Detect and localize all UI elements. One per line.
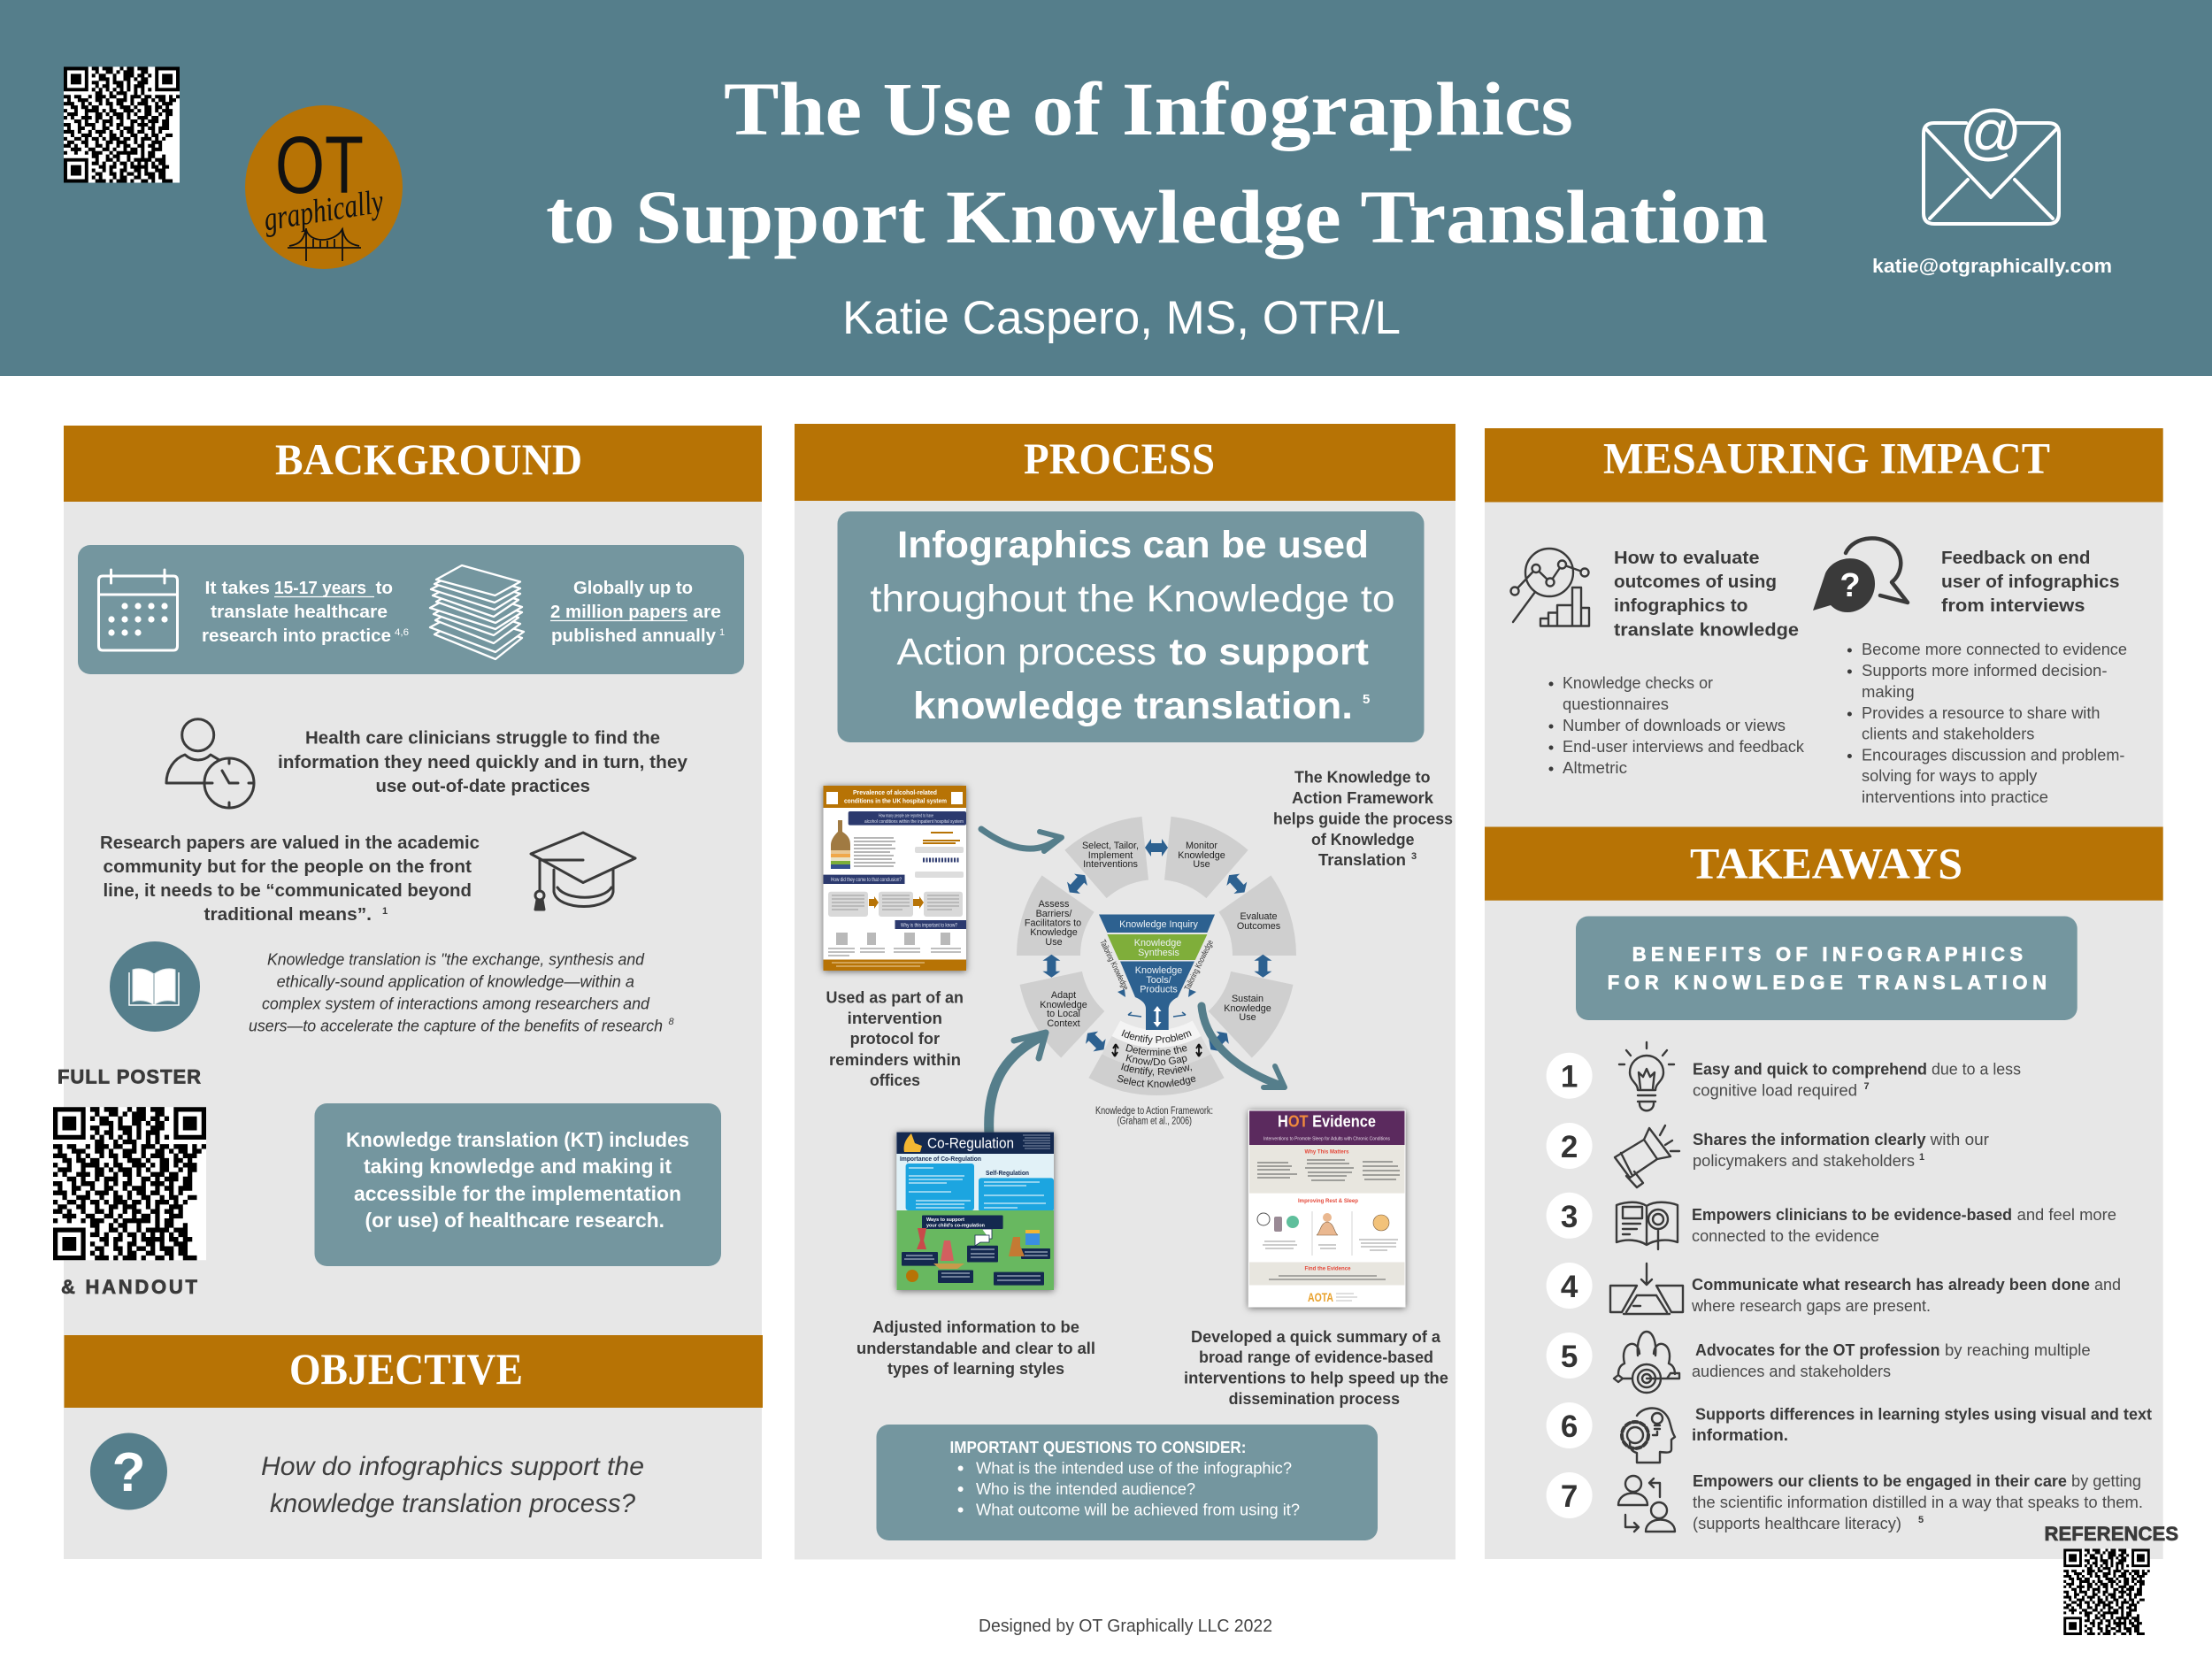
text: (supports healthcare literacy)	[1693, 1515, 1901, 1532]
text: Communicate what research has already been done	[1692, 1275, 2090, 1294]
text: research papers: Research papers are valued in the academic	[100, 833, 480, 853]
callout: benefits of infographics: BENEFITS OF INFOGRAPHICS	[1632, 943, 2023, 965]
list: evaluation methods	[1548, 674, 1805, 777]
arrow: alcohol poster to cycle	[981, 829, 1062, 851]
text: developed a quick summary: broad range of evidence-based	[1199, 1348, 1433, 1366]
icon: audience and target	[1614, 1332, 1679, 1393]
heading band: takeaways	[1485, 826, 2163, 901]
text: years: 4,6	[395, 627, 409, 638]
icon: analysis magnifier and chart	[1511, 549, 1589, 626]
infographic example: HOT evidence poster: AOTA	[1308, 1290, 1333, 1304]
title: to Support Knowledge Translation	[546, 174, 1768, 259]
list: evaluation methods: Knowledge checks or	[1563, 674, 1713, 692]
callout: infographics can be used	[837, 511, 1425, 742]
knowledge funnel	[1097, 915, 1216, 1030]
takeaway 7: 7	[1561, 1479, 1578, 1514]
text: developed a quick summary	[1184, 1327, 1448, 1408]
cycle labels: Interventions	[1083, 859, 1139, 870]
cycle labels: Knowledge	[1224, 1003, 1271, 1014]
takeaway 6	[1547, 1402, 2152, 1463]
text: used as part: Used as part of an	[826, 987, 964, 1007]
heading band: takeaways: TAKEAWAYS	[1690, 839, 1962, 888]
cycle labels: Monitor	[1186, 841, 1217, 851]
icon: calendar	[99, 570, 177, 650]
text: knowledge to action framework note: helps guide the process	[1273, 809, 1453, 828]
text	[1691, 1275, 2121, 1315]
text: how to evaluate: translate knowledge	[1614, 621, 1799, 641]
action cycle arc labels: Select Knowledge	[1117, 1075, 1196, 1087]
text: Empowers our clients to be engaged in their care	[1693, 1471, 2067, 1490]
text: research papers	[100, 833, 480, 925]
knowledge funnel: Tailoring Knowledge	[1183, 939, 1216, 992]
panel: measuring impact and takeaways	[1485, 428, 2163, 1559]
takeaway 6: 6	[1561, 1409, 1578, 1444]
text: clinicians struggle	[278, 729, 688, 796]
text: knowledge to action framework note	[1273, 768, 1453, 869]
text	[1693, 1060, 2021, 1099]
callout: infographics can be used: to support	[1170, 631, 1369, 673]
text: knowledge translation definition: 8	[669, 1017, 674, 1027]
infographic example: co-regulation poster: Importance of Co-Regulation	[900, 1155, 981, 1163]
text: used as part	[826, 987, 964, 1089]
text: clinicians struggle: information they need quickly and in turn, they	[278, 753, 688, 772]
icon: graduation cap	[531, 833, 635, 910]
caption: framework citation	[1095, 1106, 1213, 1127]
text: knowledge to action framework note: 3	[1411, 851, 1417, 862]
text: knowledge to action framework note: of Knowledge	[1311, 830, 1414, 849]
list: feedback findings	[1847, 641, 2127, 806]
icon: person with clock	[166, 719, 254, 808]
knowledge funnel: Knowledge Inquiry	[1119, 919, 1199, 930]
panel: process	[795, 424, 1455, 1559]
arrow: cycle to HOT evidence poster	[1202, 1006, 1285, 1087]
action cycle arc labels	[1117, 1030, 1196, 1087]
text: how to evaluate: outcomes of using	[1614, 572, 1777, 592]
icon: clients exchange	[1618, 1476, 1675, 1532]
action cycle arc labels: Know/Do Gap	[1125, 1055, 1187, 1065]
infographic example: HOT evidence poster: Interventions to Promote Sleep for Adults with Chronic Conditions	[1263, 1137, 1390, 1142]
logo: OT Graphically	[245, 105, 403, 269]
text: developed a quick summary: Developed a quick summary of a	[1191, 1327, 1441, 1346]
text: feedback: user of infographics	[1941, 572, 2120, 592]
infographic example: alcohol poster: conditions in the UK hospital system	[844, 796, 947, 805]
cycle labels: Knowledge	[1040, 1000, 1087, 1010]
heading: background: BACKGROUND	[275, 434, 582, 484]
takeaway 3	[1547, 1193, 2116, 1249]
list: feedback findings: making	[1862, 683, 1915, 701]
text: papers: 1	[719, 627, 725, 638]
takeaway 4: 4	[1561, 1270, 1578, 1304]
text: used as part: protocol for	[850, 1029, 940, 1048]
caption: framework citation: Knowledge to Action Framework:	[1095, 1106, 1213, 1117]
takeaway 7	[1547, 1471, 2143, 1532]
infographic example: co-regulation poster: Ways to support	[926, 1217, 964, 1223]
text: Empowers clinicians to be evidence-based	[1692, 1205, 2012, 1224]
text	[1693, 1471, 2143, 1532]
callout: KT definition: accessible for the implementation	[354, 1182, 681, 1205]
takeaway 2: 2	[1561, 1130, 1578, 1164]
icon: email envelope	[1924, 97, 2059, 224]
text: 7	[1863, 1081, 1870, 1092]
takeaway 3: 3	[1561, 1200, 1578, 1234]
text: feedback	[1941, 549, 2120, 616]
callout: important questions: Who is the intended audience?	[976, 1480, 1195, 1498]
text: knowledge to action framework note: The Knowledge to	[1294, 768, 1430, 786]
callout: KT definition: taking knowledge and making it	[364, 1155, 672, 1178]
icon: megaphone	[1615, 1125, 1679, 1187]
text: objective question: How do infographics support the	[261, 1452, 644, 1481]
callout: KT definition	[315, 1103, 721, 1266]
logo: OT Graphically: OT	[275, 120, 364, 211]
text: research papers: community but for the people on the front	[103, 857, 472, 877]
action cycle arc labels: Identify, Review,	[1121, 1063, 1193, 1078]
icon: head with gear and bulb	[1622, 1409, 1675, 1463]
icon: question mark badge: ?	[112, 1442, 145, 1503]
list: evaluation methods: questionnaires	[1563, 695, 1669, 713]
text	[1692, 1405, 2152, 1444]
QR code: header	[64, 67, 180, 182]
callout: infographics can be used: Infographics can be used	[897, 524, 1369, 566]
text: years	[202, 579, 409, 646]
icon: email envelope: @	[1959, 97, 2023, 166]
infographic example: HOT evidence poster: Improving Rest & Sleep	[1298, 1198, 1358, 1204]
cycle labels	[1025, 841, 1281, 1029]
icon: book and magnifier	[1617, 1202, 1678, 1249]
text: used as part: intervention	[848, 1009, 942, 1027]
cycle labels: Use	[1045, 937, 1063, 948]
text: and feel more	[2017, 1206, 2116, 1224]
text: how to evaluate	[1614, 549, 1799, 641]
list: feedback findings: Supports more informed decision-	[1862, 662, 2108, 680]
text: adjusted information: types of learning styles	[887, 1359, 1064, 1378]
infographic example: HOT evidence poster: Why This Matters	[1304, 1150, 1349, 1156]
callout: important questions: What outcome will be achieved from using it?	[976, 1501, 1300, 1518]
heading: process: PROCESS	[1024, 434, 1215, 483]
text: papers: Globally up to	[573, 579, 693, 598]
text: objective question	[261, 1452, 644, 1518]
cycle labels: Sustain	[1232, 994, 1263, 1004]
text: clinicians struggle: Health care clinicians struggle to find the	[305, 729, 660, 749]
author: Katie Caspero, MS, OTR/L	[842, 292, 1401, 344]
list: evaluation methods: Altmetric	[1563, 759, 1627, 777]
cycle labels: Facilitators to	[1025, 918, 1081, 929]
text: adjusted information: Adjusted information to be	[872, 1317, 1079, 1336]
icon: open book badge	[110, 941, 200, 1032]
panel: objective	[64, 1335, 763, 1518]
list: feedback findings: interventions into practice	[1862, 788, 2048, 806]
text: research papers: line, it needs to be “communicated beyond	[103, 881, 472, 901]
icon: question speech bubbles: ?	[1839, 567, 1861, 604]
text: used as part: reminders within	[829, 1050, 961, 1069]
knowledge funnel: Synthesis	[1138, 948, 1180, 958]
text: audiences and stakeholders	[1692, 1363, 1891, 1380]
cycle labels: Outcomes	[1237, 921, 1281, 932]
heading: objective: OBJECTIVE	[289, 1344, 523, 1394]
text: adjusted information	[856, 1317, 1095, 1378]
text: feedback: from interviews	[1941, 596, 2085, 616]
text: cognitive load required	[1693, 1081, 1857, 1099]
text	[1692, 1340, 2091, 1380]
text: adjusted information: understandable and clear to all	[856, 1339, 1095, 1357]
text: papers: 2 million papers	[550, 603, 687, 622]
icon: question mark badge	[90, 1433, 167, 1509]
action cycle arc labels: Identify Problem	[1122, 1030, 1192, 1045]
cycle labels: Select, Tailor,	[1082, 841, 1139, 851]
text: by reaching multiple	[1945, 1341, 2091, 1359]
cycle labels: Assess	[1039, 899, 1070, 910]
cycle labels: Implement	[1088, 850, 1133, 861]
infographic example: co-regulation poster	[896, 1133, 1054, 1290]
text: information.	[1692, 1425, 1788, 1444]
text: by getting	[2071, 1472, 2141, 1490]
infographic example: HOT evidence poster: HOT Evidence	[1278, 1113, 1376, 1131]
text: how to evaluate: How to evaluate	[1614, 549, 1759, 568]
cycle labels: to Local	[1047, 1009, 1080, 1019]
infographic example: alcohol poster: alcohol conditions within the inpatient hospital system	[864, 819, 964, 825]
cycle labels: Use	[1239, 1012, 1256, 1023]
text	[1693, 1130, 1989, 1170]
infographic example: alcohol poster: Prevalence of alcohol-related	[853, 788, 937, 796]
email address: katie@otgraphically.com	[1872, 255, 2112, 277]
text: Shares the information clearly	[1693, 1130, 1926, 1148]
infographic example: co-regulation poster: your child's co-regulation	[926, 1223, 986, 1228]
callout: important questions: What is the intended use of the infographic?	[976, 1460, 1292, 1478]
infographic example: HOT evidence poster: Find the Evidence	[1304, 1267, 1351, 1272]
text: where research gaps are present.	[1691, 1297, 1931, 1315]
list: feedback findings: solving for ways to apply	[1862, 767, 2037, 785]
list: feedback findings: Encourages discussion and problem-	[1862, 746, 2124, 764]
text: knowledge translation definition: users—to accelerate the capture of the benefits of research	[249, 1018, 663, 1035]
list: evaluation methods: End-user interviews and feedback	[1563, 738, 1805, 756]
text: policymakers and stakeholders	[1693, 1152, 1915, 1170]
takeaway 5	[1547, 1332, 2091, 1393]
label: full poster: FULL POSTER	[58, 1065, 201, 1088]
text: 5	[1918, 1515, 1924, 1525]
knowledge funnel: Tools/	[1146, 975, 1171, 986]
text: research papers: traditional means”.	[204, 905, 372, 925]
text: objective question: knowledge translation process?	[270, 1489, 635, 1518]
knowledge funnel: Products	[1140, 985, 1178, 995]
text: knowledge translation definition: complex system of interactions among researchers and	[262, 995, 650, 1012]
title: The Use of Infographics	[724, 66, 1573, 151]
list: feedback findings: clients and stakeholders	[1862, 726, 2034, 743]
callout: important questions	[876, 1425, 1378, 1540]
callout: KT definition: (or use) of healthcare research.	[365, 1209, 664, 1232]
text: connected to the evidence	[1692, 1227, 1879, 1245]
QR code: full poster	[53, 1107, 206, 1260]
knowledge funnel: Knowledge	[1134, 938, 1181, 949]
cycle labels: Knowledge	[1178, 850, 1225, 861]
text: knowledge translation definition	[249, 950, 674, 1035]
diagram: knowledge to action cycle	[1017, 817, 1296, 1095]
takeaway 2	[1547, 1123, 1989, 1187]
cycle labels: Barriers/	[1036, 909, 1071, 919]
text: the scientific information distilled in a way that speaks to them.	[1693, 1494, 2143, 1511]
knowledge funnel: Tailoring Knowledge	[1097, 938, 1130, 992]
cycle arrows	[1042, 839, 1271, 1056]
text: due to a less	[1932, 1060, 2021, 1078]
takeaway 5: 5	[1561, 1340, 1578, 1374]
title	[546, 66, 1768, 259]
takeaway 1: 1	[1561, 1060, 1578, 1094]
text: Advocates for the OT profession	[1695, 1340, 1939, 1359]
takeaway 4	[1547, 1263, 2121, 1315]
text: years: research into practice	[202, 626, 391, 646]
text: years: 15-17 years	[274, 579, 366, 598]
text: Supports differences in learning styles using visual and text	[1695, 1405, 2152, 1424]
knowledge funnel: Knowledge	[1135, 965, 1182, 976]
takeaway 1	[1547, 1042, 2021, 1110]
callout: KT definition: Knowledge translation (KT) includes	[346, 1128, 689, 1151]
text: knowledge translation definition: ethically-sound application of knowledge—within a	[277, 973, 634, 991]
text: years: It takes	[205, 579, 270, 598]
callout: benefits of infographics: FOR KNOWLEDGE TRANSLATION	[1608, 972, 2047, 994]
infographic example: alcohol poster	[823, 786, 966, 971]
cycle segments	[1017, 817, 1296, 1095]
text: research papers: 1	[382, 906, 388, 917]
infographic example: alcohol poster: Why is this important to know?	[901, 924, 958, 929]
panel: background	[53, 426, 762, 1559]
callout: infographics can be used: knowledge translation.	[913, 685, 1353, 727]
callout: important questions: IMPORTANT QUESTIONS TO CONSIDER:	[950, 1439, 1246, 1456]
text: papers: published annually	[551, 626, 717, 646]
callout: infographics can be used: 5	[1363, 692, 1370, 707]
infographic example: alcohol poster: How many people are reported to have	[879, 814, 933, 819]
text: clinicians struggle: use out-of-date practices	[375, 777, 590, 796]
heading: measuring impact: MESAURING IMPACT	[1603, 434, 2050, 483]
caption: framework citation: (Graham et al., 2006)	[1118, 1117, 1192, 1127]
label: and handout: & HANDOUT	[61, 1276, 198, 1298]
text: knowledge to action framework note: Translation	[1318, 850, 1406, 869]
header banner	[0, 0, 2212, 376]
text: years: to	[375, 579, 393, 598]
callout: years and papers	[78, 545, 744, 674]
text: 1	[1919, 1152, 1924, 1163]
text: developed a quick summary: dissemination process	[1229, 1389, 1400, 1408]
gap arrows	[1112, 1044, 1202, 1056]
text: developed a quick summary: interventions to help speed up the	[1184, 1368, 1448, 1387]
list: evaluation methods: Number of downloads or views	[1563, 717, 1786, 734]
infographic example: HOT evidence poster	[1248, 1110, 1405, 1307]
cycle labels: Knowledge	[1030, 927, 1078, 938]
text: how to evaluate: infographics to	[1614, 596, 1748, 616]
icon: research gap	[1610, 1263, 1683, 1314]
text: used as part: offices	[870, 1071, 920, 1089]
callout: infographics can be used: Action process	[897, 631, 1156, 673]
text: feedback: Feedback on end	[1941, 549, 2090, 568]
QR code: references	[2063, 1548, 2150, 1635]
callout: infographics can be used: throughout the Knowledge to	[871, 578, 1394, 620]
icon: question speech bubbles	[1813, 538, 1908, 612]
logo: OT Graphically: graphically	[261, 183, 386, 238]
cycle labels: Context	[1047, 1018, 1080, 1029]
text: papers	[550, 579, 725, 646]
list: feedback findings: Become more connected to evidence	[1862, 641, 2127, 658]
action cycle arc labels: Determine the	[1125, 1044, 1187, 1056]
list: feedback findings: Provides a resource to share with	[1862, 704, 2101, 722]
text	[1692, 1205, 2116, 1245]
text: years: translate healthcare	[211, 603, 388, 622]
text: knowledge to action framework note: Action Framework	[1292, 788, 1434, 807]
infographic example: co-regulation poster: Self-Regulation	[986, 1169, 1029, 1177]
footer credit: Designed by OT Graphically LLC 2022	[979, 1617, 1272, 1636]
infographic example: alcohol poster: How did they come to that conclusion?	[831, 878, 902, 883]
cycle labels: Evaluate	[1240, 911, 1278, 922]
text: papers: are	[693, 603, 721, 622]
cycle labels: Adapt	[1051, 990, 1076, 1001]
arrow: co-regulation poster to cycle	[989, 1033, 1046, 1134]
label: references: REFERENCES	[2044, 1523, 2178, 1545]
icon: paper stack	[430, 565, 524, 659]
text: Easy and quick to comprehend	[1693, 1060, 1927, 1078]
cycle labels: Use	[1193, 859, 1210, 870]
callout: benefits of infographics	[1576, 917, 2078, 1020]
infographic example: co-regulation poster: Co-Regulation	[927, 1134, 1014, 1152]
text: and	[2094, 1276, 2121, 1294]
text: with our	[1930, 1131, 1989, 1148]
icon: light bulb	[1619, 1042, 1674, 1110]
text: knowledge translation definition: Knowledge translation is "the exchange, synthesis and	[267, 950, 645, 968]
